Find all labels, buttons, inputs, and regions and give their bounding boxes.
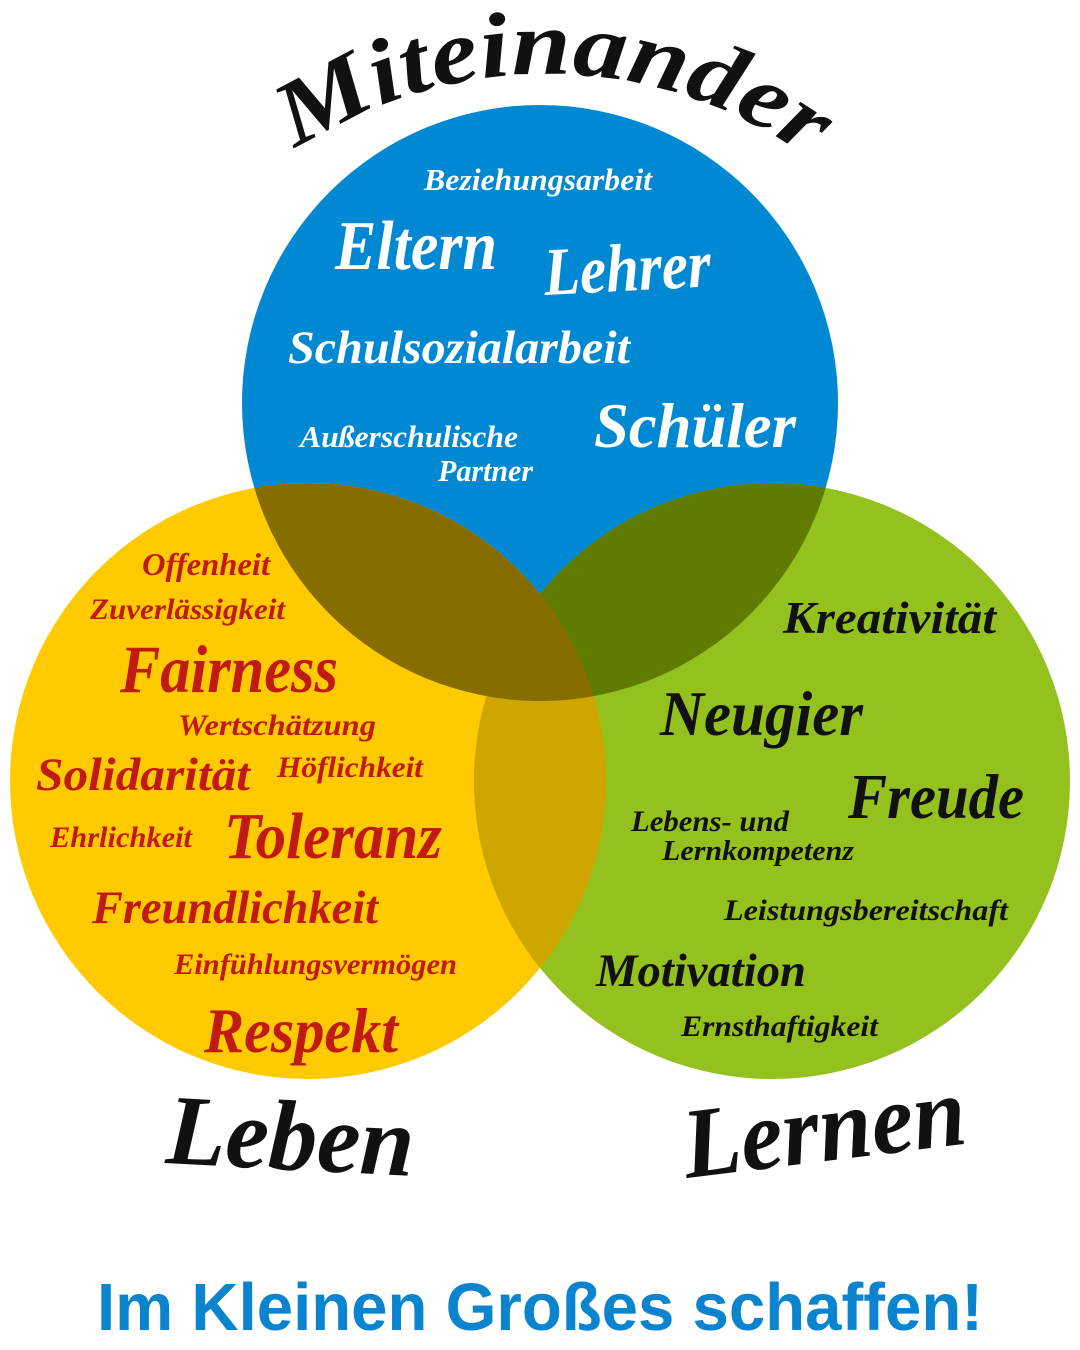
word: Ehrlichkeit: Ehrlichkeit	[49, 821, 194, 854]
word: Lebens- und: Lebens- und	[630, 805, 790, 838]
overlap: yellow and green	[474, 696, 606, 968]
word: Lehrer: Lehrer	[541, 225, 713, 310]
heading: Lernen: Lernen	[675, 1055, 972, 1200]
word: Wertschätzung: Wertschätzung	[178, 709, 376, 742]
circle: Miteinander (blue)	[242, 105, 838, 701]
word: Schüler: Schüler	[594, 390, 797, 461]
word: Ernsthaftigkeit: Ernsthaftigkeit	[680, 1010, 880, 1043]
word: Motivation: Motivation	[595, 945, 806, 997]
word: Schulsozialarbeit: Schulsozialarbeit	[288, 322, 632, 374]
circle: Lernen (green)	[474, 483, 1070, 1079]
circle: Leben (yellow)	[10, 483, 606, 1079]
word: Partner: Partner	[437, 453, 534, 488]
word: Kreativität: Kreativität	[782, 593, 998, 643]
word: Außerschulische: Außerschulische	[298, 419, 518, 454]
overlap: blue and green	[486, 483, 826, 701]
word: Zuverlässigkeit: Zuverlässigkeit	[89, 593, 287, 626]
tagline: Im Kleinen Großes schaffen!	[97, 1270, 983, 1345]
word: Solidarität: Solidarität	[36, 749, 252, 801]
word: Leistungsbereitschaft: Leistungsbereitschaft	[723, 894, 1010, 927]
word: Neugier: Neugier	[659, 678, 864, 749]
text group: green circle words	[595, 593, 1024, 1043]
word: Offenheit: Offenheit	[142, 546, 271, 582]
word: Beziehungsarbeit: Beziehungsarbeit	[423, 162, 653, 197]
heading: Leben: Leben	[163, 1074, 417, 1198]
word: Respekt: Respekt	[203, 995, 400, 1066]
word: Eltern: Eltern	[334, 208, 497, 285]
word: Einfühlungsvermögen: Einfühlungsvermögen	[173, 948, 457, 981]
word: Höflichkeit: Höflichkeit	[276, 751, 425, 784]
word: Lernkompetenz: Lernkompetenz	[661, 836, 854, 867]
word: Toleranz: Toleranz	[224, 800, 442, 873]
text group: yellow circle words	[36, 546, 457, 1066]
word: Freundlichkeit: Freundlichkeit	[91, 882, 380, 934]
text group: blue circle words	[288, 162, 797, 488]
word: Freude: Freude	[847, 761, 1024, 832]
overlap: blue and yellow	[254, 483, 594, 701]
word: Fairness: Fairness	[119, 631, 338, 707]
